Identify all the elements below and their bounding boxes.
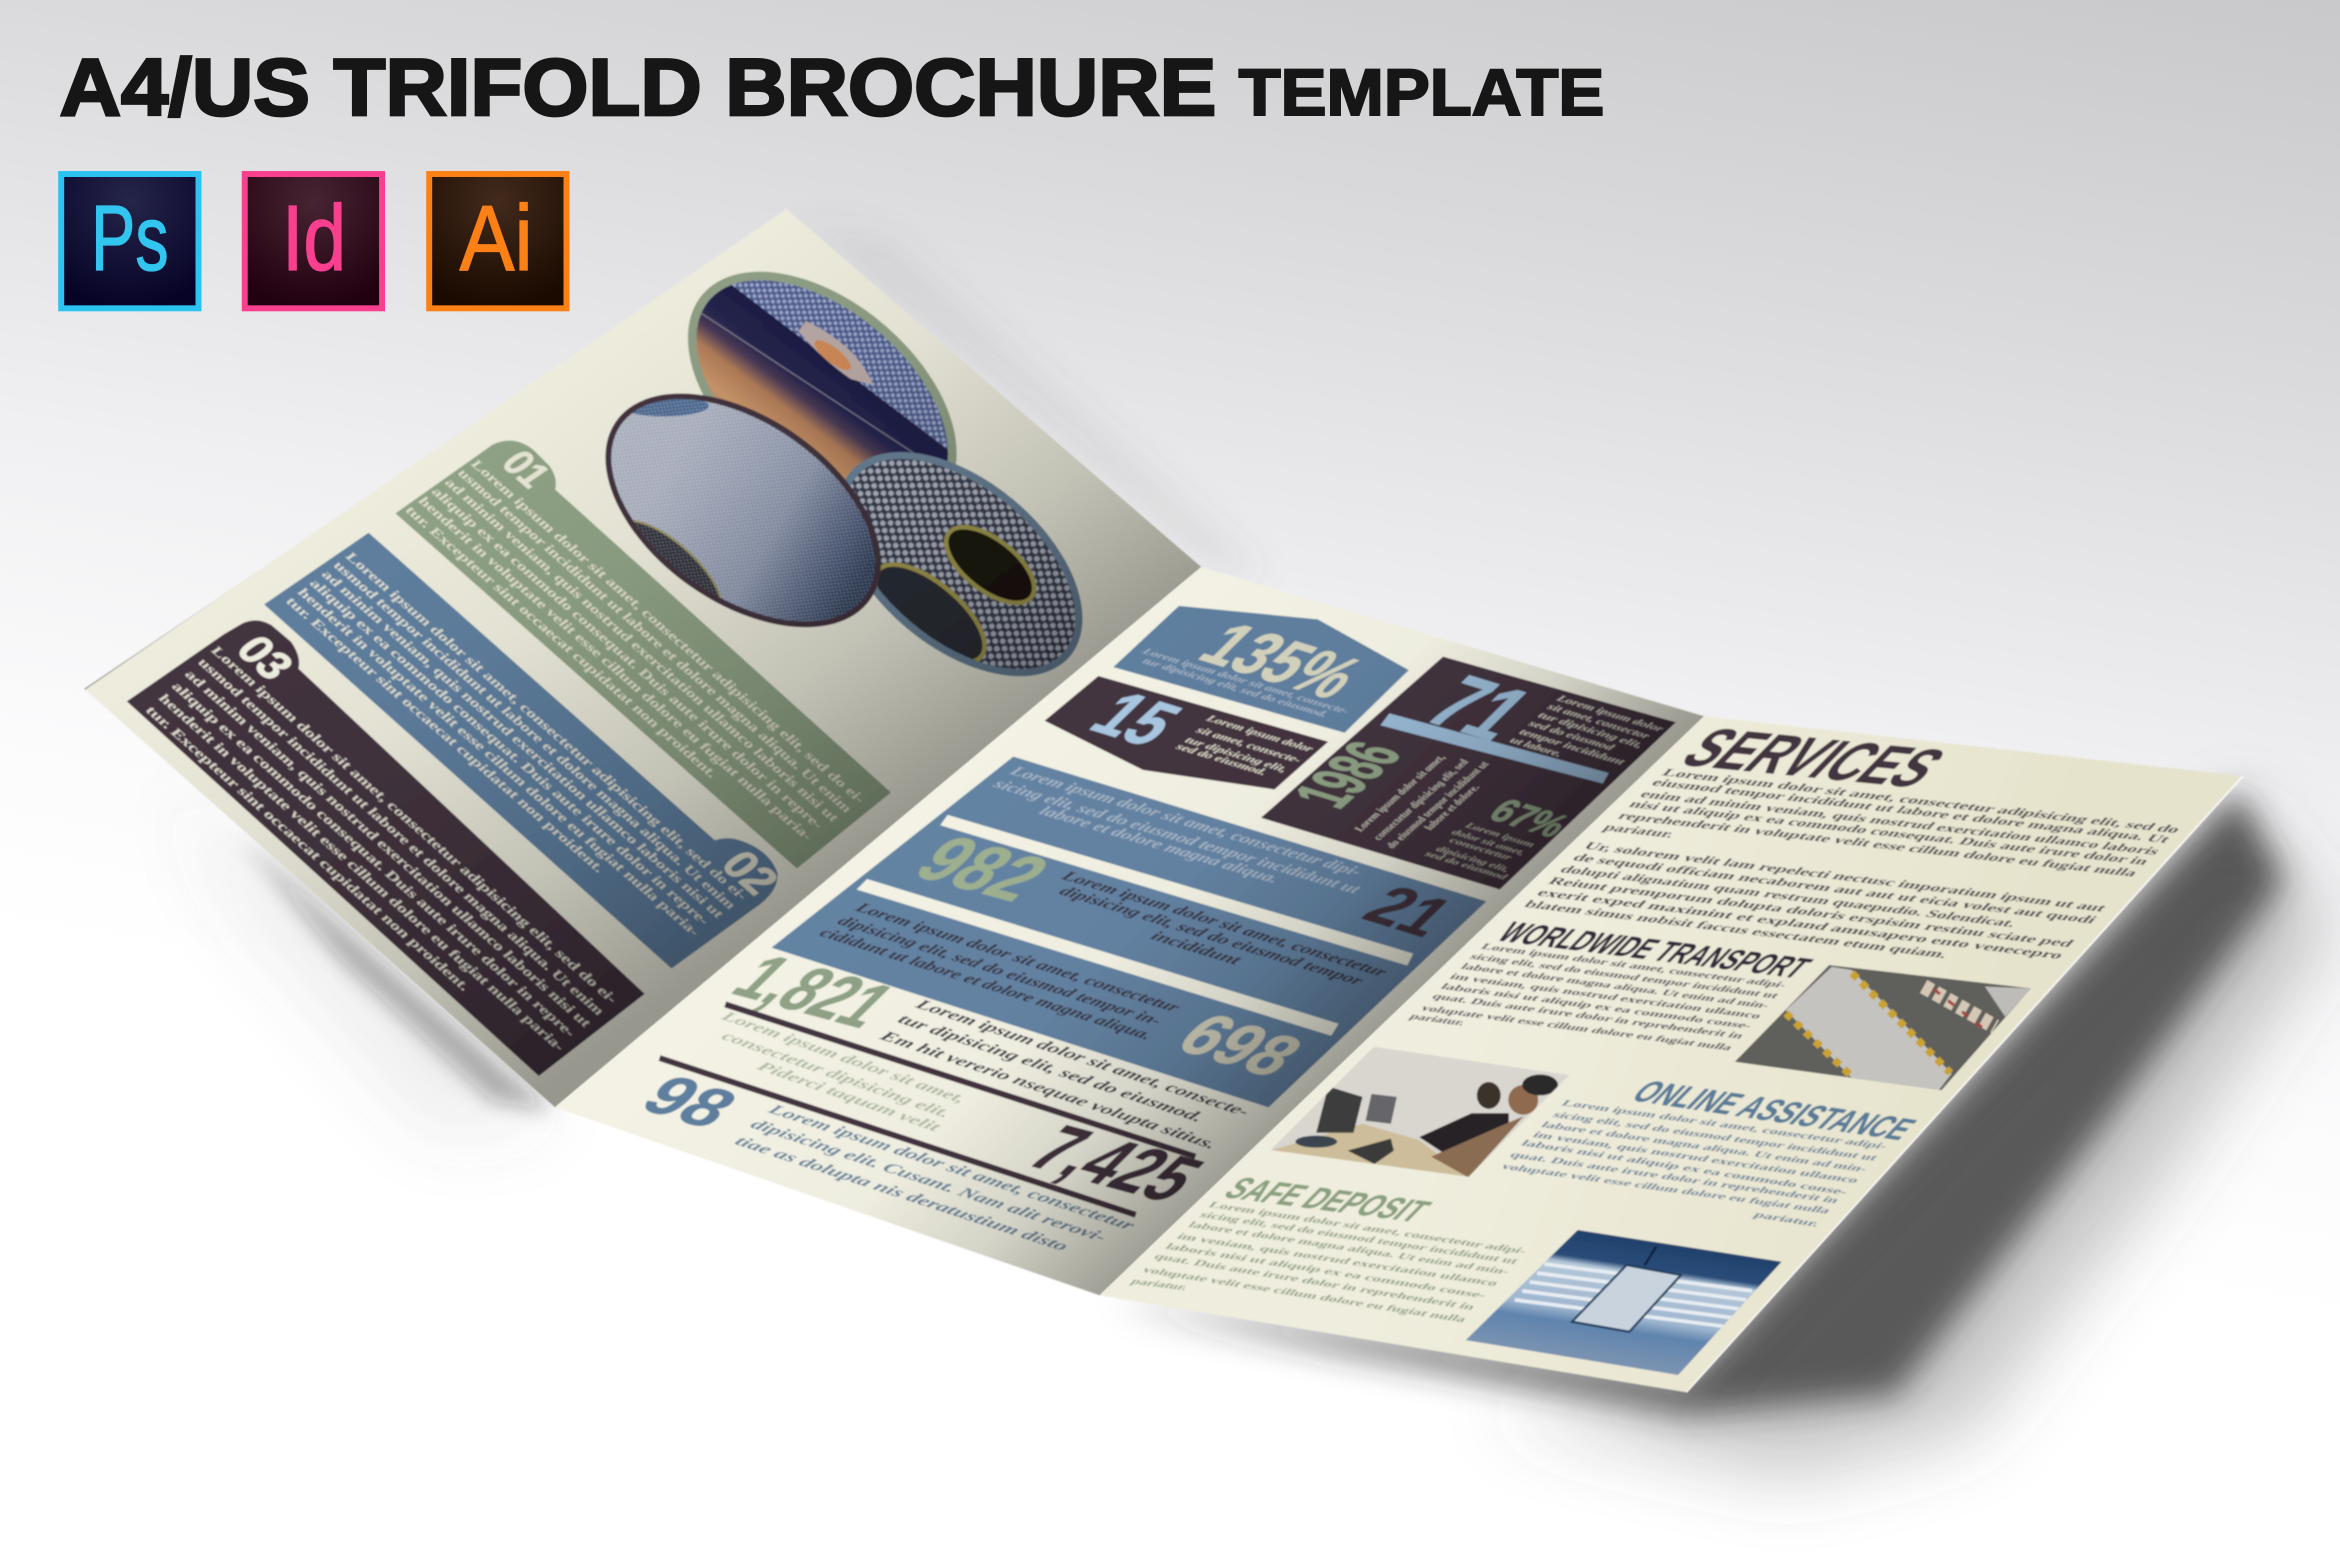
text services: Reiunt premporum dolupta doloris erspisim restinu sciate ped [1545, 874, 2078, 949]
text 15: sed do eiusmod. [1172, 741, 1271, 777]
icon: InDesign [245, 174, 382, 308]
icon: Photoshop: Ps [91, 186, 169, 290]
icon: Illustrator: Ai [460, 186, 533, 290]
text centre green [717, 1009, 970, 1134]
text 01: ad minim veniam, quis nostrud exercitation ullamco laboris nisi ut [441, 476, 843, 825]
panel: centre page [555, 567, 1704, 1295]
text online assistance: laboris nisi ut aliquip ex ea commodo conse- [1518, 1138, 1852, 1197]
number 71: 71 [1406, 661, 1552, 755]
text 1986: consectetur dipisicing elit, sed [1369, 758, 1473, 841]
text 71: tur dipisicing elit, [1535, 710, 1646, 750]
panel: left page [85, 209, 1201, 1107]
text centre green: Lorem ipsum dolor sit amet, [717, 1009, 970, 1106]
text centre dark: tur dipisicing elit, sed do eiusmod. [893, 1012, 1208, 1125]
image circle: green rim [687, 270, 958, 480]
text services: pariatur. [1600, 821, 1679, 840]
text 02: ad minim veniam, quis nostrud exercitation ullamco laboris nisi ut [318, 568, 728, 921]
heading safe deposit: SAFE DEPOSIT [1215, 1171, 1439, 1229]
text services: de sequodi officiam necaborem aut aut ut eicia volest aut quodi [1569, 851, 2101, 926]
text safe deposit: Lorem ipsum dolor sit amet, consectetur adipi- [1206, 1199, 1530, 1256]
text 67% [1421, 821, 1537, 882]
text 1986: Lorem ipsum dolor sit amet, [1350, 754, 1449, 833]
text safe deposit: sicing elit, sed do eiusmod tempor incididunt ut [1197, 1209, 1522, 1266]
text 71: tempor incididunt [1517, 727, 1628, 767]
text worldwide transport: sicing elit, sed do eiusmod tempor incididunt ut [1467, 951, 1783, 1000]
image circle: dark rim [604, 392, 882, 628]
stat 7,425: 7,425 [1011, 1112, 1221, 1215]
text 71: ut labore. [1507, 735, 1566, 759]
text 67%: sed do eiusmod [1421, 849, 1510, 882]
number 698: 698 [1162, 1002, 1318, 1089]
text 71 [1507, 693, 1667, 767]
text centre blue: dipisicing elit. Cusant. Nam alit rerovi- [746, 1117, 1111, 1245]
text 01: Lorem ipsum dolor sit amet, consectetur adipisicing elit, sed do ei- [467, 457, 869, 806]
panel: right page: WORLDWIDE TRANSPORT [1489, 917, 1819, 984]
text safe deposit: voluptate velit esse cillum dolore eu fugiat nulla [1140, 1265, 1470, 1324]
cream bar 2 [857, 879, 1339, 1036]
text worldwide transport [1407, 941, 1790, 1052]
text online assistance: sicing elit, sed do eiusmod tempor incididunt ut [1550, 1110, 1882, 1163]
text 02: usmod tempor incididunt ut labore et dolore magna aliqua. Ut enim [330, 559, 740, 912]
text safe deposit: quat. Duis aute irure dolor in reprehenderit in [1151, 1251, 1479, 1312]
text worldwide transport: labore et dolore magna aliqua. Ut enim ad min- [1458, 961, 1773, 1010]
large blue block [772, 757, 1486, 1107]
text worldwide transport: pariatur. [1407, 1011, 1469, 1027]
stat block dark group 71 1986 67% [1261, 657, 1676, 889]
stat 1,821: 1,821 [716, 942, 912, 1041]
icon: Photoshop [61, 174, 198, 308]
number 02: 02 [711, 842, 790, 903]
image: call centre staff [1271, 1046, 1568, 1178]
text worldwide transport: im veniam, quis nostrud exercitation ullamco [1447, 971, 1765, 1021]
stat 7,425 [660, 1058, 1221, 1215]
number 03: 03 [226, 627, 305, 688]
text services: dolupti alignatium quam restrum quaepudio. Solendicat. [1556, 863, 2021, 929]
text 03: aliquip ex ea commodo consequat. Duis aute irure dolor in repre- [168, 679, 580, 1040]
text 02: aliquip ex ea commodo consequat. Duis aute irure dolor in repre- [306, 576, 714, 928]
text worldwide transport: quat. Duis aute irure dolor in reprehenderit in [1429, 991, 1748, 1041]
text online assistance: quat. Duis aute irure dolor in reprehenderit in [1507, 1149, 1843, 1205]
heading services: SERVICES [1666, 717, 1961, 799]
text 01: aliquip ex ea commodo consequat. Duis aute irure dolor in repre- [428, 485, 828, 832]
text services: enim ad minim veniam, quis nostrud exercitation ullamco laboris [1637, 788, 2164, 857]
text centre dark: Em hit vererio nsequae volupta sitius. [875, 1028, 1222, 1152]
brochure shadows [179, 224, 2328, 1477]
text blue 1: sicing elit, sed do eiusmod tempor incididunt ut [988, 776, 1365, 897]
text 15 [1172, 713, 1318, 777]
text centre blue: tiae as dolupta nis deratustium disto [730, 1133, 1073, 1254]
title secondary: TEMPLATE [1239, 56, 1604, 129]
text safe deposit: labore et dolore magna aliqua. Ut enim ad min- [1186, 1219, 1513, 1276]
text blue 2: incididunt [1147, 929, 1246, 968]
text blue 1: Lorem ipsum dolor sit amet, consectetur dipi- [1005, 763, 1367, 879]
text 71: sit amet, consector [1544, 701, 1653, 741]
text 67%: dolor sit amet, [1449, 828, 1528, 857]
text blue 3: dipisicing elit, sed do eiusmod tempor in- [833, 913, 1167, 1028]
text services: eiusmod tempor incididunt ut labore et dolore magna aliqua. Ut [1648, 776, 2175, 845]
text safe deposit: im veniam, quis nostrud exercitation ullamco [1174, 1231, 1502, 1288]
text online assistance: labore et dolore magna aliqua. Ut enim ad min- [1539, 1120, 1871, 1174]
text centre green: consectetur dipisicing elit. [718, 1029, 955, 1120]
text 02: henderit in voluptate velit esse cillum dolore eu fugiat nulla paria- [294, 585, 704, 938]
text blue 3: cididunt ut labore et dolore magna aliqua. [815, 925, 1157, 1043]
block 03 dark [127, 620, 645, 1076]
text online assistance: Lorem ipsum dolor sit amet, consectetur adipi- [1559, 1098, 1891, 1151]
rule 2 [660, 1058, 1136, 1215]
text safe deposit [1128, 1199, 1530, 1324]
text 03: usmod tempor incididunt ut labore et dolore magna aliqua. Ut enim [195, 656, 609, 1018]
text centre blue: Lorem ipsum dolor sit amet, consectetur [763, 1101, 1140, 1233]
text services: exerit exped maximint et expland amusapero ento venecepro [1533, 886, 2068, 961]
text worldwide transport: laboris nisi ut aliquip ex ea commodo conse- [1438, 981, 1756, 1031]
text 135: Lorem ipsum dolor sit amet, consecte- [1139, 646, 1353, 716]
number 15: 15 [1074, 680, 1197, 759]
text 02: tur. Excepteur sint occaecat cupidatat non proident. [282, 594, 609, 875]
number 135%: 135% [1184, 610, 1380, 711]
panel: right page [1100, 716, 2243, 1392]
text worldwide transport: Lorem ipsum dolor sit amet, consectetur adipi- [1478, 941, 1790, 990]
number 21: 21 [1349, 875, 1468, 948]
divider bar light blue [1380, 713, 1609, 783]
text 71: Lorem ipsum dolor [1553, 693, 1667, 734]
text 67%: dipisicing elit, [1434, 845, 1512, 874]
icon: Illustrator [429, 174, 566, 308]
text safe deposit: laboris nisi ut aliquip ex ea commodo conse- [1163, 1241, 1490, 1300]
image: bank vault [1466, 1229, 1782, 1376]
block 02 blue [264, 533, 790, 969]
text 71: sed do eiusmod [1525, 718, 1618, 752]
text online assistance: voluptate velit esse cillum dolore eu fugiat nulla [1498, 1161, 1834, 1215]
text 15: sit amet, consecte- [1192, 724, 1305, 765]
text 02: Lorem ipsum dolor sit amet, consectetur adipisicing elit, sed do ei- [342, 550, 752, 903]
text services: nisi ut aliquip ex ea commodo consequat. Duis aute irure dolor in [1625, 798, 2153, 867]
stat block 15 [1045, 676, 1328, 789]
text services [1521, 766, 2184, 961]
text 01: tur. Excepteur sint occaecat cupidatat non proident. [402, 503, 722, 780]
text 135: tur dipisicing elit, sed do eiusmod. [1140, 656, 1331, 719]
text services: blatem simus nobisit faccus essectatem etum quiam. [1521, 898, 1953, 960]
stat block 135% [1113, 606, 1409, 733]
heading online assistance: ONLINE ASSISTANCE [1623, 1075, 1924, 1147]
stat 1,821 [716, 942, 1195, 1157]
text services: Lorem ipsum dolor sit amet, consectetur adipisicing elit, sed do [1658, 766, 2184, 836]
text online assistance: im veniam, quis nostrud exercitation ullamco [1530, 1130, 1863, 1185]
text blue 2: Lorem ipsum dolor sit amet, consectetur [1056, 868, 1392, 980]
image circle: blue rim [844, 451, 1084, 677]
text 15: tur dipisicing elit, [1182, 735, 1291, 774]
number 1986: 1986 [1277, 734, 1419, 815]
text 03: henderit in voluptate velit esse cillum dolore eu fugiat nulla paria- [155, 691, 569, 1053]
icon: InDesign: Id [282, 186, 346, 290]
text worldwide transport: voluptate velit esse cillum dolore eu fugiat nulla [1418, 1003, 1737, 1052]
text centre dark: Lorem ipsum dolor sit amet, consecte- [910, 996, 1255, 1120]
text 01: usmod tempor incididunt ut labore et dolore magna aliqua. Ut enim [454, 466, 856, 815]
text blue 1: labore et dolore magna aliqua. [1035, 803, 1284, 886]
text services: Ur, solorem velit lam repelecti nectusc imporatium ipsum ut aut [1580, 839, 2111, 914]
title main: A4/US TRIFOLD BROCHURE [60, 43, 1216, 133]
title [60, 43, 1604, 133]
number 01: 01 [492, 443, 560, 495]
text blue 2: dipisicing elit, sed do eiusmod tempor [1055, 883, 1368, 988]
text 03: Lorem ipsum dolor sit amet, consectetur adipisicing elit, sed do ei- [208, 644, 621, 1006]
text 67%: Lorem ipsum [1462, 821, 1537, 849]
text blue 3: Lorem ipsum dolor sit amet, consectetur [850, 900, 1185, 1015]
text services: reprehenderit in voluptate velit esse cillum dolore eu fugiat nulla [1614, 809, 2142, 879]
block 01 green [395, 441, 891, 869]
text 03: ad minim veniam, quis nostrud exercitation ullamco laboris nisi ut [181, 668, 596, 1030]
cream bar 1 [940, 815, 1413, 966]
number 982: 982 [898, 823, 1067, 914]
text 03: tur. Excepteur sint occaecat cupidatat non proident. [142, 703, 474, 993]
number 67%: 67% [1480, 792, 1578, 844]
text 15: Lorem ipsum dolor [1203, 713, 1318, 754]
number 98: 98 [626, 1064, 752, 1140]
rule 1 [725, 1004, 1195, 1157]
text online assistance: pariatur. [1751, 1209, 1823, 1229]
text 1986: do eiusmod tempor incididunt ut [1382, 760, 1492, 849]
text 1986: labore et dolore. [1420, 784, 1483, 831]
text 67%: consectetur [1447, 836, 1515, 862]
text online assistance [1498, 1098, 1891, 1229]
text safe deposit: pariatur. [1128, 1276, 1192, 1292]
text centre green: Piderci taquam velit [752, 1059, 945, 1134]
image: warehouse aerial [1734, 964, 2031, 1091]
text 01: henderit in voluptate velit esse cillum dolore eu fugiat nulla paria- [415, 494, 817, 843]
